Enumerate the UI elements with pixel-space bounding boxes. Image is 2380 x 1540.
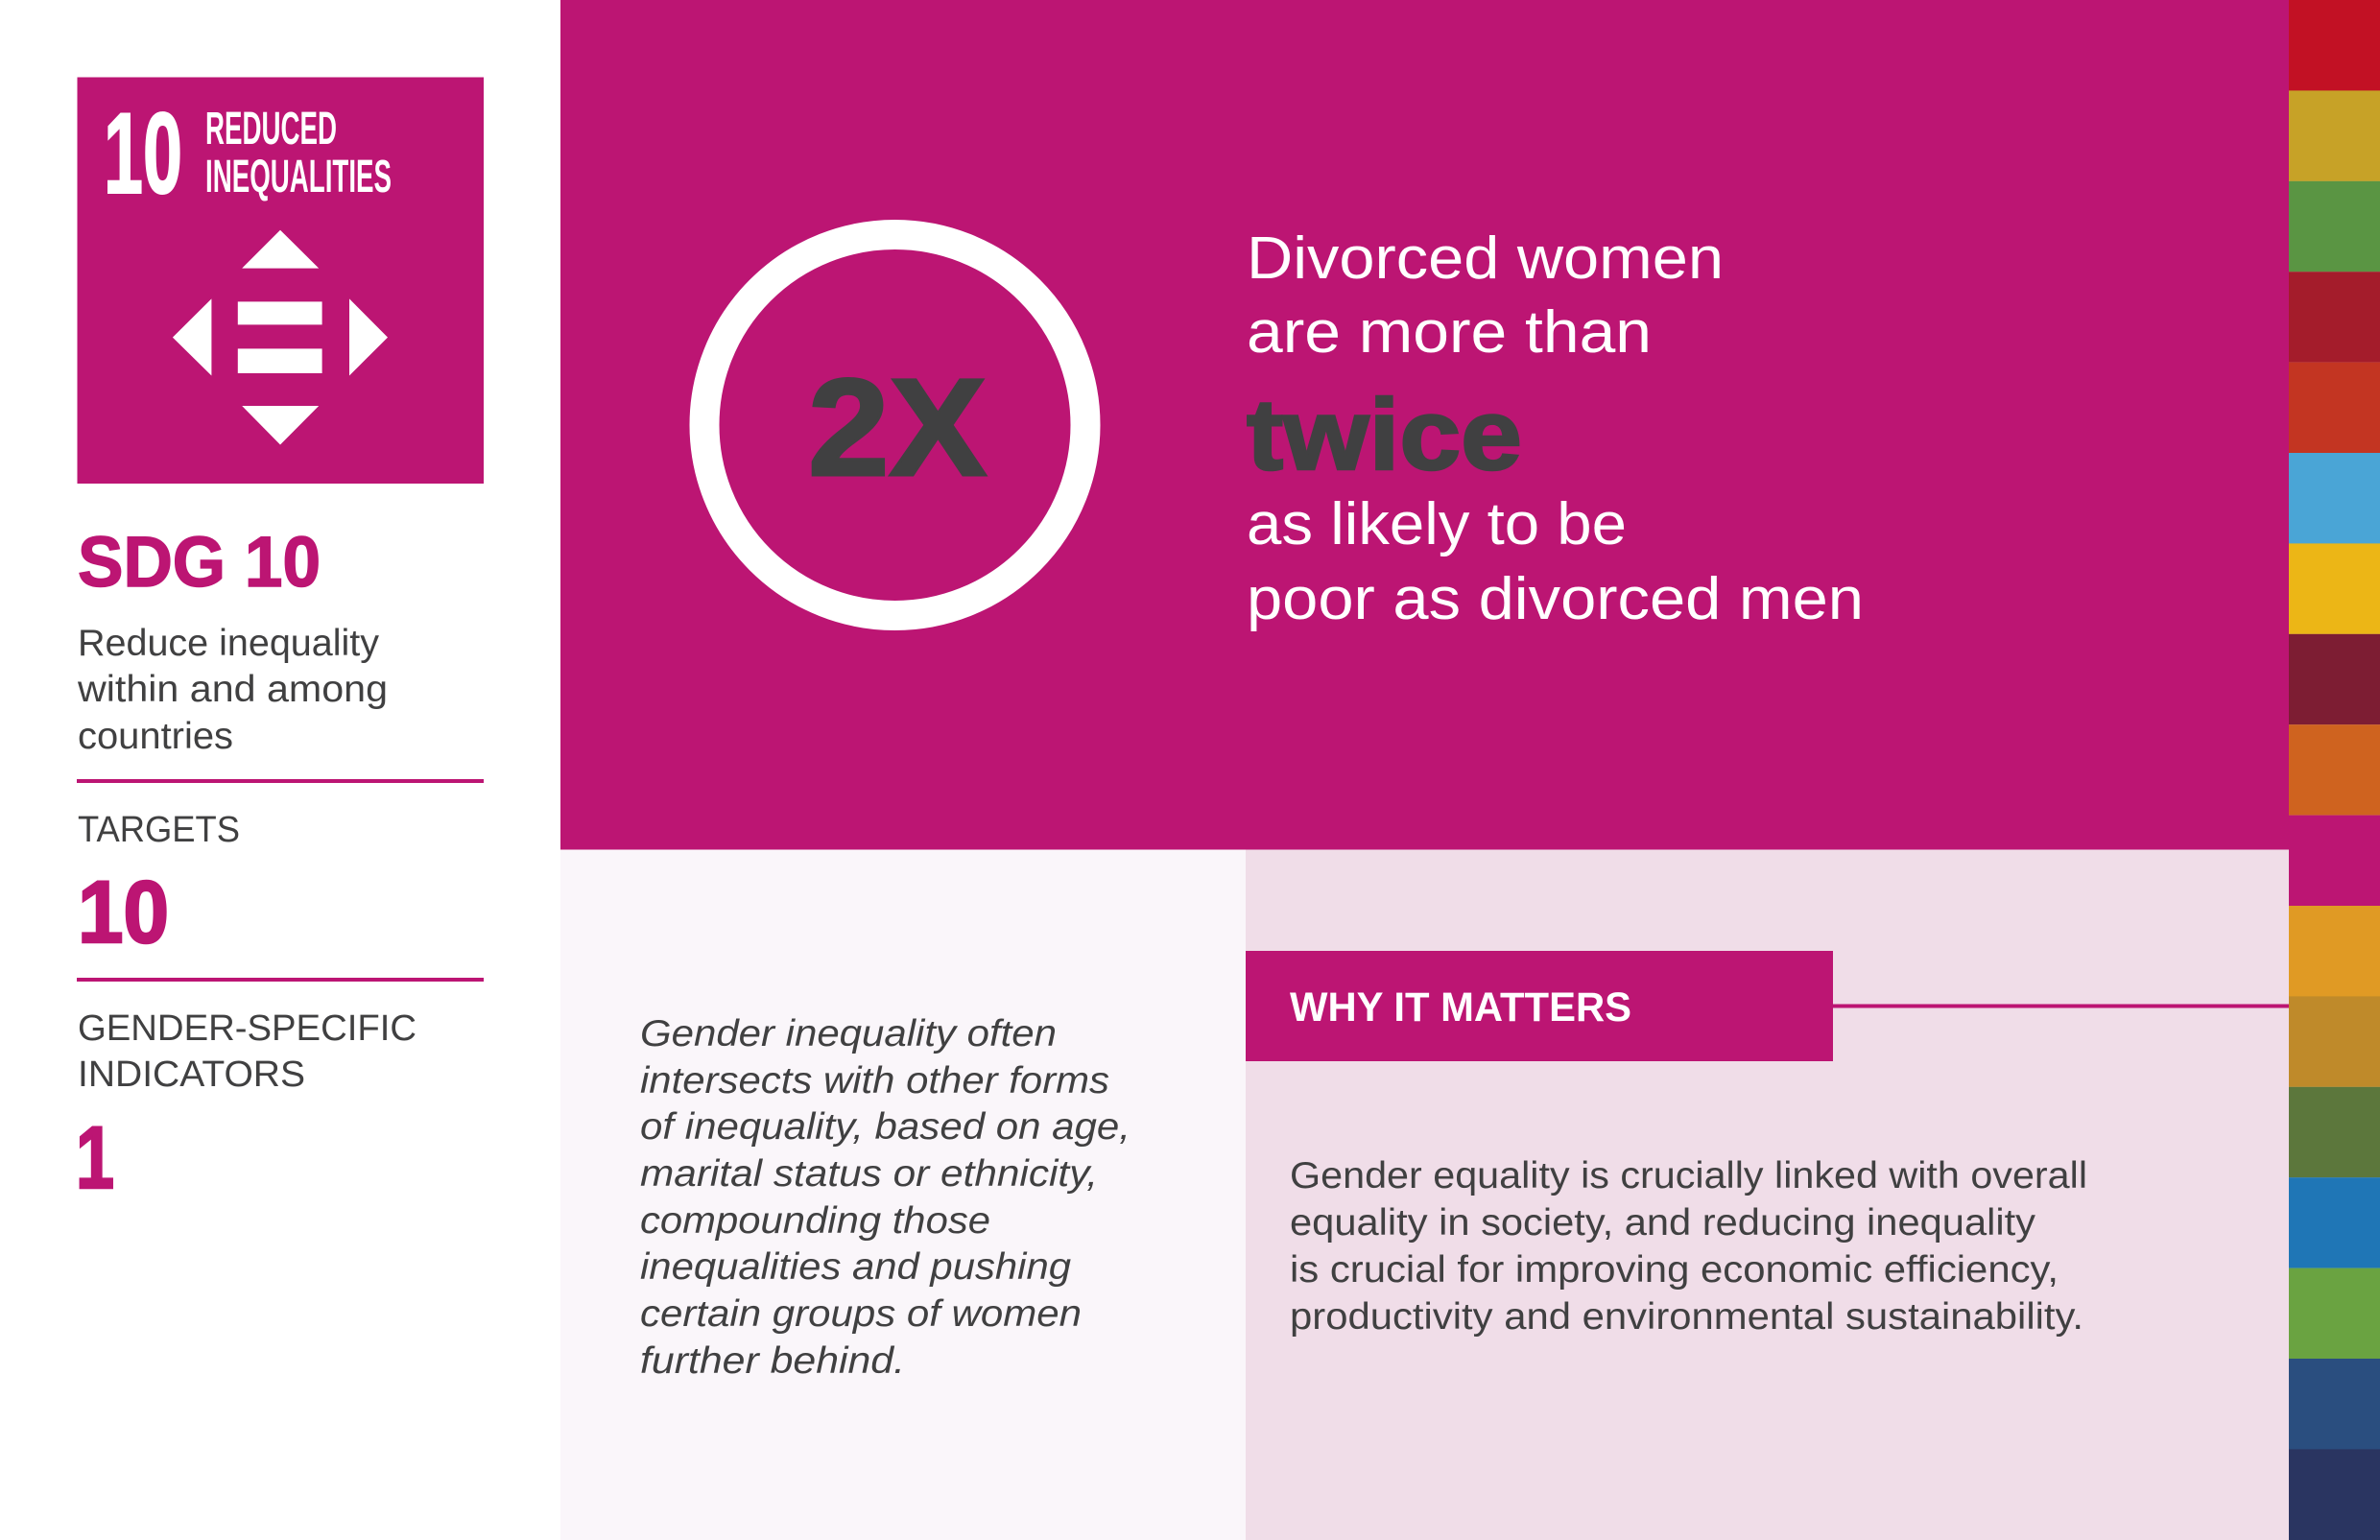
text block: intersecting inequalities: Gender inequality often: [640, 1013, 1057, 1054]
text block: statistic statement: Divorced women: [1247, 225, 1724, 292]
panel: italic context note: [560, 850, 1246, 1540]
text block: goal description: countries: [78, 716, 233, 757]
icon: SDG 10 goal tile: [77, 77, 484, 484]
text block: intersecting inequalities: intersects with other forms: [640, 1060, 1109, 1102]
icon: circle with 2X: 2X: [808, 350, 987, 505]
text block: why it matters body: equality in society, and reducing inequality: [1290, 1202, 2036, 1244]
number: targets count: 10: [78, 864, 169, 961]
heading banner: why it matters: [1246, 951, 1833, 1061]
text block: why it matters body: [1290, 1155, 2087, 1338]
icon: circle with 2X: [704, 234, 1085, 616]
text block: goal description: Reduce inequality: [78, 623, 379, 664]
panel: key statistic: [560, 0, 2289, 850]
text block: goal description: within and among: [77, 669, 388, 710]
text block: statistic statement: poor as divorced men: [1247, 566, 1864, 632]
text block: goal description: [77, 623, 388, 757]
heading banner: why it matters: WHY IT MATTERS: [1290, 984, 1631, 1031]
goal name: [205, 104, 392, 202]
label: gender-specific indicators: GENDER-SPECIFIC: [78, 1008, 416, 1049]
text block: why it matters body: productivity and environmental sustainability.: [1290, 1296, 2083, 1338]
text block: intersecting inequalities: further behind.: [640, 1340, 905, 1382]
colour strip: all 17 SDG colours: [2289, 0, 2380, 1540]
text block: intersecting inequalities: of inequality, based on age,: [640, 1106, 1130, 1148]
text block: intersecting inequalities: compounding those: [640, 1200, 990, 1242]
text block: statistic statement: [1247, 225, 1864, 632]
goal number: 10: [104, 89, 182, 218]
label: gender-specific indicators: [78, 1008, 416, 1095]
label: gender-specific indicators: INDICATORS: [78, 1054, 305, 1095]
text block: statistic statement: are more than: [1247, 299, 1652, 366]
text block: statistic statement: as likely to be: [1247, 491, 1627, 557]
number: indicators count: 1: [76, 1109, 114, 1207]
text block: why it matters body: Gender equality is crucially linked with overall: [1290, 1155, 2087, 1196]
panel: SDG 10 sidebar: [76, 77, 484, 1207]
text block: intersecting inequalities: [640, 1013, 1130, 1382]
text block: why it matters body: is crucial for improving economic efficiency,: [1290, 1249, 2059, 1291]
text block: intersecting inequalities: certain groups of women: [640, 1293, 1082, 1335]
goal name: INEQUALITIES: [205, 152, 392, 202]
text block: intersecting inequalities: inequalities and pushing: [640, 1246, 1072, 1288]
emphasis: twice: twice: [1247, 379, 1522, 491]
goal name: REDUCED: [205, 104, 337, 154]
heading: SDG 10: SDG 10: [78, 522, 321, 602]
icon: inequality arrows and equals sign: [173, 230, 388, 445]
panel: why it matters: [1246, 850, 2289, 1540]
text block: intersecting inequalities: marital status or ethnicity,: [640, 1153, 1098, 1195]
label: targets: TARGETS: [78, 810, 240, 850]
